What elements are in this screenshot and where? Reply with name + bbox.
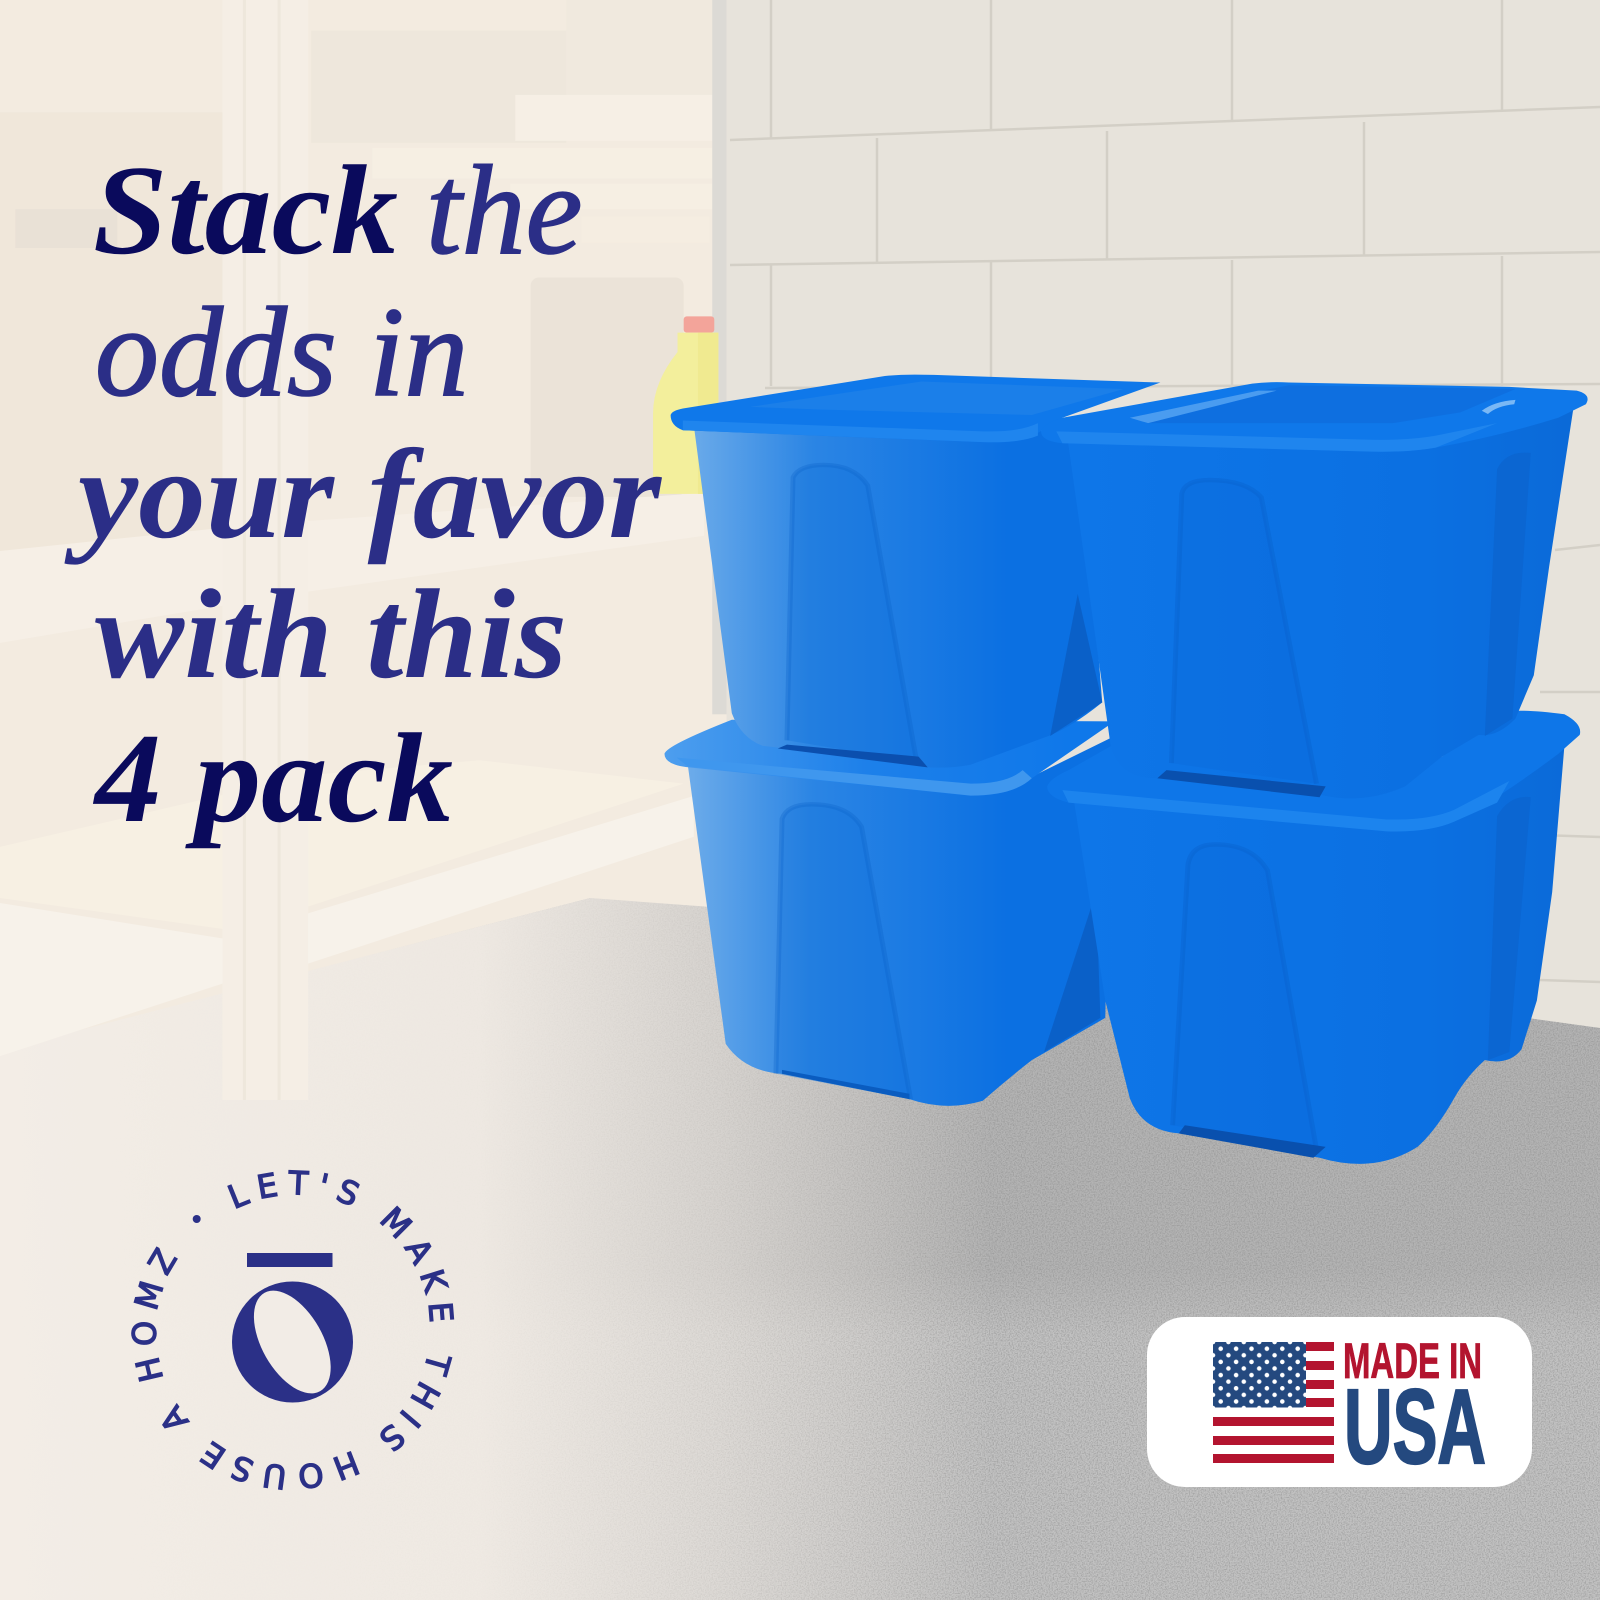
heading line 3: your favor bbox=[64, 423, 662, 565]
badge: Made in USA bbox=[1147, 1317, 1532, 1487]
product photo: four stacked blue storage bins bbox=[664, 375, 1588, 1164]
heading line 1: the bbox=[426, 139, 582, 281]
heading line 2: odds in bbox=[95, 281, 468, 423]
bin: top left bbox=[671, 375, 1160, 768]
heading: Stack the odds in your favor with this 4 pack bbox=[64, 139, 662, 849]
background: speckled concrete floor bbox=[432, 898, 1600, 1600]
logo mark: ring O bbox=[232, 1278, 353, 1406]
background: faded shelving unit bbox=[0, 0, 727, 1100]
icon: yellow detergent bottle bbox=[653, 316, 718, 494]
background: cinder block wall bbox=[700, 0, 1600, 1060]
bin: bottom left bbox=[664, 720, 1114, 1106]
text: MADE IN: MADE IN bbox=[1343, 1333, 1482, 1389]
heading line 1: Stack bbox=[93, 139, 398, 281]
logo: circular Homz badge bbox=[131, 1170, 454, 1490]
heading line 5: 4 pack bbox=[93, 707, 453, 849]
bin: bottom right bbox=[1047, 711, 1580, 1164]
text: USA: USA bbox=[1344, 1368, 1486, 1486]
heading line 4: with this bbox=[95, 563, 567, 705]
icon: American flag bbox=[1213, 1342, 1334, 1463]
logo ring text: LET'S MAKE THIS HOUSE A HOMZ bbox=[131, 1170, 454, 1490]
bin: top right bbox=[1041, 382, 1588, 798]
logo mark: macron bar bbox=[247, 1253, 332, 1267]
logo ring dot bbox=[193, 1215, 201, 1223]
